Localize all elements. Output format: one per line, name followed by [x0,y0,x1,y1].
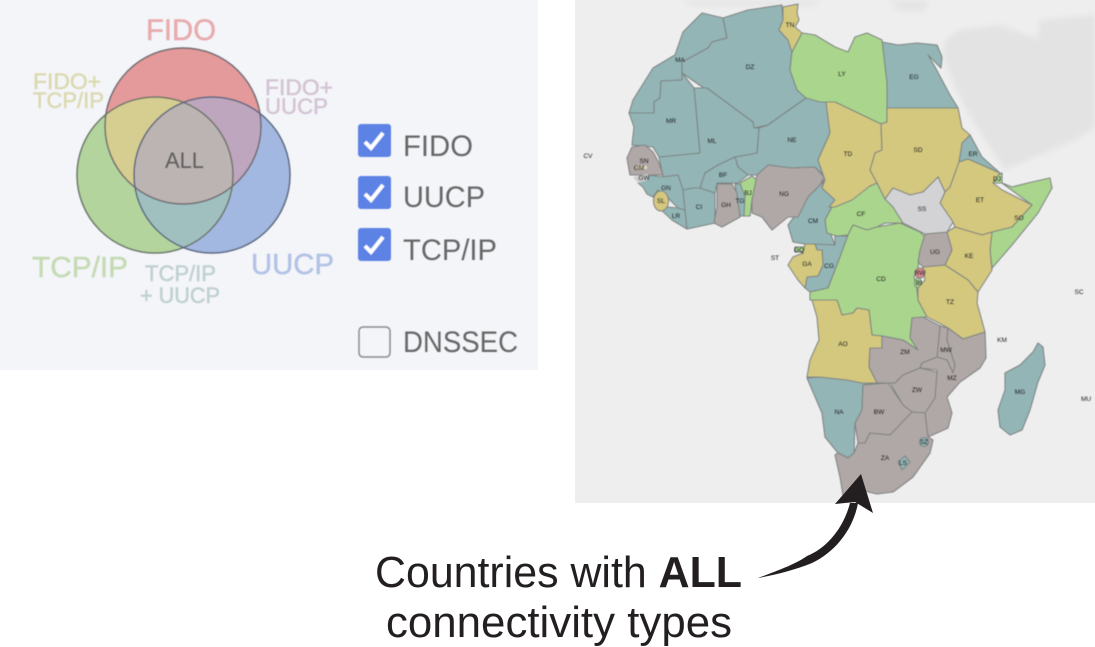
country codes: GN [661,185,671,192]
country group: teal, two connectivity types [629,5,1045,458]
Venn labels: FIDO+ [265,75,333,100]
country: Eswatini [920,438,928,446]
country codes: KE [965,253,974,260]
country codes: MR [666,118,676,125]
legend checkbox: FIDO [358,124,473,163]
legend checkbox: DNSSEC: DNSSEC [403,326,518,359]
country codes: BF [719,172,727,179]
legend checkbox: TCP/IP [358,228,497,267]
Venn labels: + UUCP [140,283,220,308]
country codes: ER [968,151,978,158]
country codes: SO [1014,215,1024,222]
country codes: GH [721,202,731,209]
legend checkbox: DNSSEC [359,326,518,359]
country codes: SN [639,158,649,165]
country codes: GW [638,175,650,182]
country group: green, one connectivity type [740,33,1052,350]
country codes: CV [583,153,593,160]
Venn labels: ALL [165,148,204,173]
country codes: TD [844,151,853,158]
country codes: GM [634,165,644,172]
country codes: KM [997,337,1007,344]
arrow: pointing to South Africa [758,474,873,578]
country codes: MG [1015,389,1025,396]
countries [627,4,1052,495]
country codes: GQ [794,247,804,254]
country codes: SD [913,147,923,154]
country codes: SL [657,198,665,205]
country codes: NG [779,191,789,198]
country codes: CF [857,211,865,218]
country codes: ZA [881,455,890,462]
Venn labels: TCP/IP [32,252,128,284]
country codes: NA [834,409,844,416]
Venn labels: TCP/IP [33,88,104,113]
country group: grey, all connectivity types [627,145,986,495]
caption: Countries with ALL [375,548,742,597]
country codes: SZ [920,439,928,446]
country codes: SS [918,206,927,213]
country codes: LY [838,71,846,78]
country codes: MW [940,347,953,354]
country codes: ZM [900,349,910,356]
country codes: MZ [947,375,957,382]
Venn diagram [77,48,290,253]
panel: Africa map [575,0,1095,503]
legend checkbox: FIDO: FIDO [403,130,473,163]
country codes: GA [802,261,812,268]
legend checkbox: UUCP [358,176,485,214]
country codes: CD [876,276,886,283]
strip: Gambia and Guinea-Bissau [636,166,647,169]
country codes: BW [874,409,885,416]
country codes: BJ [744,190,752,197]
Venn labels: TCP/IP [145,261,216,286]
country codes: NE [787,137,797,144]
country codes: LS [899,460,908,467]
Venn labels: UUCP [251,249,334,281]
country codes: BI [916,280,922,287]
legend checkbox: UUCP: UUCP [403,181,485,214]
country: South Sudan [885,177,953,234]
country codes: MU [1081,396,1091,403]
country codes: UG [930,249,940,256]
country codes: AO [838,341,848,348]
country codes: MA [675,57,686,64]
country codes: TN [786,22,795,29]
Venn labels: FIDO [146,14,216,47]
country codes: ZW [912,387,923,394]
country codes [583,22,1091,467]
country codes: TG [735,198,745,205]
country codes: TZ [946,299,954,306]
country codes: RW [915,270,926,277]
country codes: ST [771,255,779,262]
country codes: SC [1074,289,1084,296]
country codes: ET [976,197,984,204]
country codes: LR [672,213,680,220]
Venn labels: FIDO+ [33,69,101,94]
country codes: CG [824,263,834,270]
background land: Middle East [682,0,1095,170]
country: Lesotho [898,456,910,470]
panel: Venn diagram and legend [0,0,538,370]
country codes: CI [696,204,702,211]
country codes: ML [707,138,717,145]
country: Rwanda [915,268,925,278]
country codes: EG [909,74,919,81]
Venn labels: UUCP [265,94,328,119]
caption: connectivity types [386,598,732,647]
country codes: CM [808,218,818,225]
legend checkbox: TCP/IP: TCP/IP [403,234,497,267]
country codes: DZ [746,64,754,71]
country group: yellow, two connectivity types [654,4,1032,383]
Venn labels [32,14,334,308]
country codes: DJ [993,176,1001,183]
caption [375,548,742,647]
